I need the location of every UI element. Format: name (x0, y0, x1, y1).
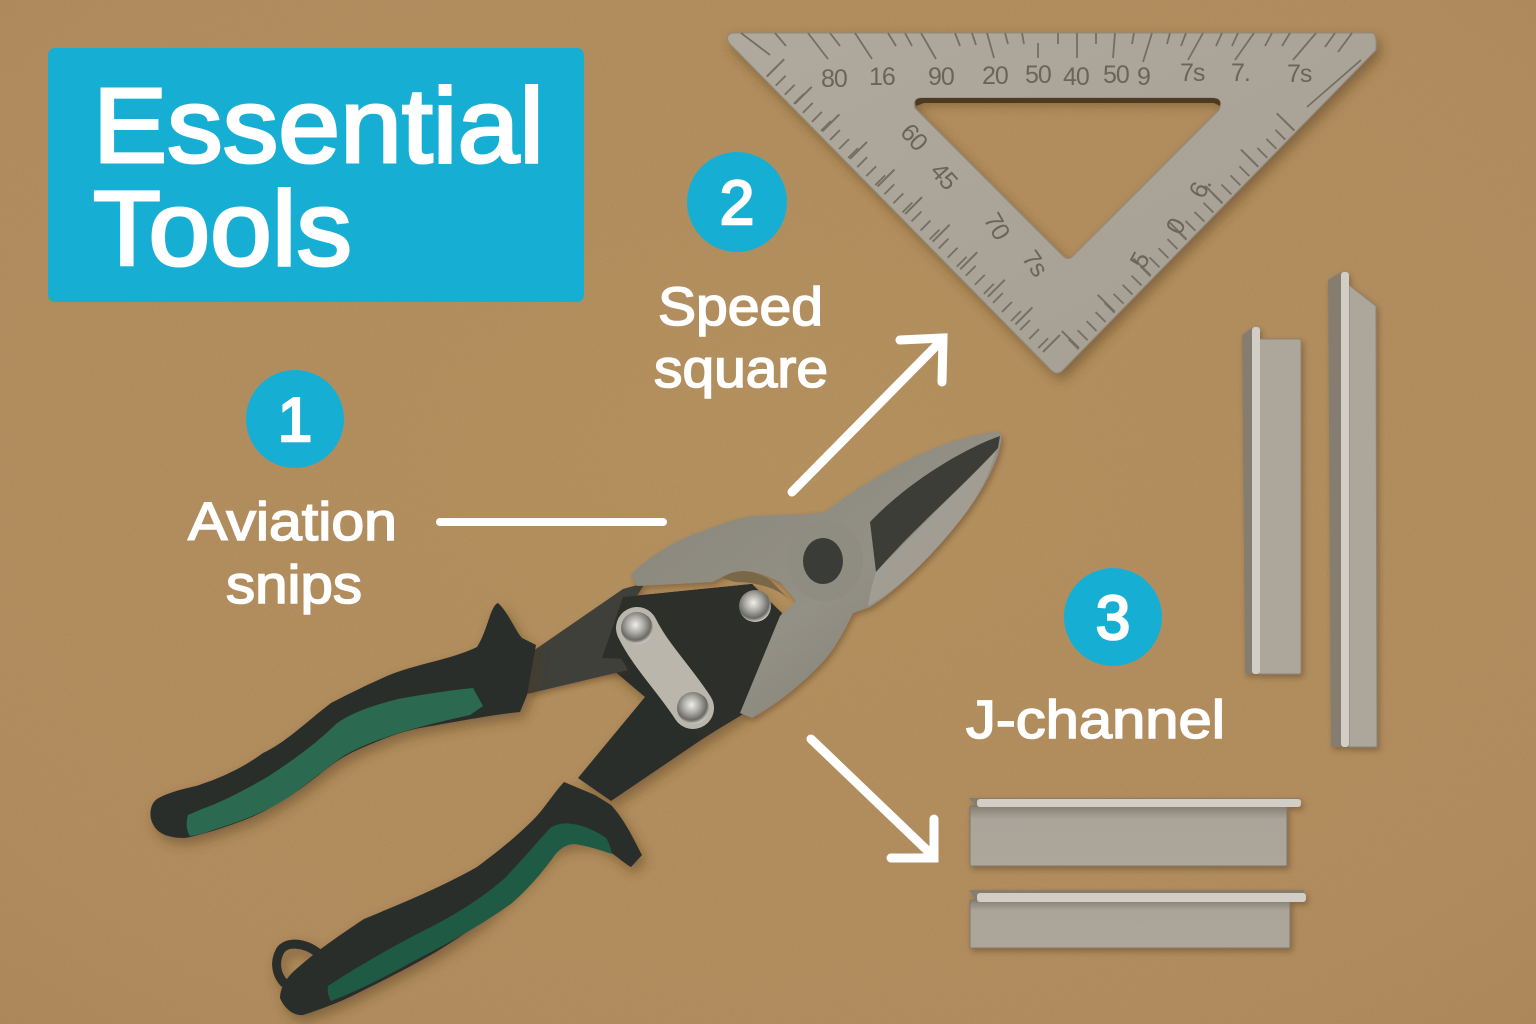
J-channel pieces (969, 272, 1377, 948)
badge 2: 2 (720, 169, 754, 238)
scale numbers: 90 (928, 63, 954, 91)
scale numbers: 45 (925, 157, 963, 195)
top scale ticks (741, 33, 1361, 107)
speed square tool (727, 33, 1376, 373)
lower handle arm and pivot plate (578, 584, 780, 801)
aviation snips tool (150, 432, 1001, 1015)
lower grip with loop (277, 782, 642, 1015)
horizontal channel upper (969, 798, 1301, 866)
screws (621, 590, 771, 724)
scale numbers: 7s (1016, 245, 1053, 282)
gap behind pivot (722, 571, 790, 600)
badge 2 (687, 152, 787, 252)
scale numbers: 7s (1180, 59, 1205, 87)
vertical channel short (1242, 327, 1301, 674)
right edge ticks (1067, 125, 1290, 351)
arrow to speed square (792, 338, 943, 492)
scale numbers: 50 (1103, 61, 1129, 89)
badge 3: 3 (1096, 584, 1130, 653)
scale numbers: 50 (1025, 61, 1051, 89)
dark blade face (870, 436, 1000, 572)
pivot bolt (787, 521, 863, 601)
scale numbers: 5 (1125, 248, 1155, 273)
label: Aviation snips: snips (226, 555, 362, 615)
horizontal channel lower (969, 890, 1306, 948)
black plate (602, 584, 782, 740)
title text: Tools (93, 170, 352, 288)
badge 1 (246, 370, 344, 468)
label: Aviation snips: Aviation (188, 492, 397, 552)
upper grip (150, 603, 536, 838)
light cutting edge (868, 451, 996, 606)
upper handle metal arm (527, 583, 645, 694)
label: Speed square: Speed (658, 277, 823, 337)
scale numbers: 0 (1161, 214, 1191, 239)
label: Speed square: square (654, 339, 828, 399)
upper grip green inlay (187, 688, 483, 836)
scale numbers: 7. (1231, 59, 1250, 87)
silver link plate (637, 628, 693, 708)
scale numbers: 9 (1137, 63, 1150, 91)
scale numbers: 7s (1287, 60, 1312, 88)
scale numbers: 70 (978, 208, 1015, 244)
connector line to snips (440, 518, 663, 526)
upper jaw and blade (631, 432, 1001, 718)
scale numbers (821, 59, 1312, 282)
badge 3 (1064, 568, 1162, 666)
arrow to J-channel (811, 739, 934, 858)
cutout inner shadow (915, 98, 1220, 106)
scale numbers: 40 (1063, 63, 1089, 91)
vertical channel long (1328, 272, 1377, 747)
scale numbers: 6. (1184, 173, 1217, 203)
scale numbers: 60 (895, 118, 933, 156)
square body with triangular cutout (727, 33, 1376, 373)
left edge ticks (771, 71, 1051, 351)
label: J-channel: J-channel (966, 690, 1225, 750)
scale numbers: 20 (982, 62, 1008, 90)
scale numbers: 80 (821, 65, 847, 93)
badge 1: 1 (278, 386, 312, 455)
scale numbers: 16 (869, 63, 895, 91)
lower grip green inlay (328, 823, 612, 1001)
title text: Essential (93, 67, 544, 185)
title panel: Essential Tools (48, 48, 584, 302)
